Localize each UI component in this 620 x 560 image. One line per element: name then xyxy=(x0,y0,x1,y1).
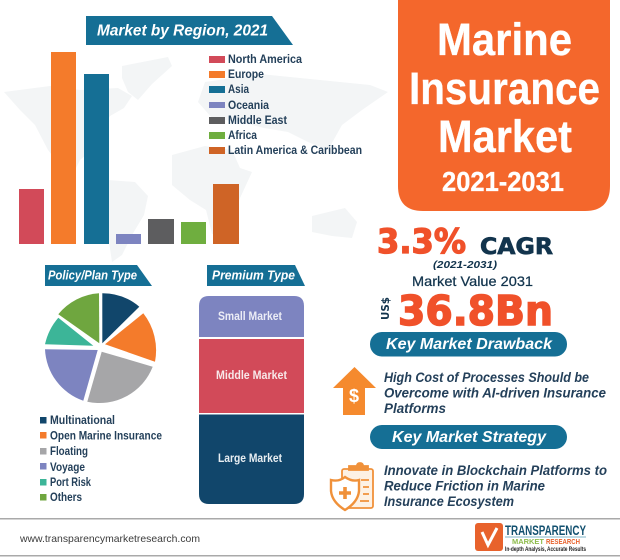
legend: policy/plan types: Voyage xyxy=(50,462,85,474)
segment: middle market: Middle Market xyxy=(216,370,287,382)
slice: Open Marine Insurance xyxy=(105,313,156,362)
strategy text xyxy=(384,463,607,509)
title panel: Market xyxy=(438,111,572,162)
slice: Voyage xyxy=(45,349,98,401)
icon: rising cost arrow: $ xyxy=(349,386,359,406)
heading pill: key market strategy xyxy=(370,425,567,449)
heading banner: premium type: Premium Type xyxy=(212,268,295,282)
legend: regions: Africa xyxy=(228,130,258,142)
drawback text xyxy=(384,370,606,416)
slice: Floating xyxy=(87,352,153,403)
legend: regions xyxy=(209,54,362,157)
stacked bar: premium type xyxy=(199,296,304,504)
bar: Middle East xyxy=(148,219,174,244)
strategy text: Insurance Ecosystem xyxy=(384,494,514,509)
footer rules xyxy=(0,518,620,520)
heading banner: market by region: Market by Region, 2021 xyxy=(97,22,268,40)
legend: policy/plan types: Floating xyxy=(50,446,88,458)
bar: Asia xyxy=(84,74,109,244)
legend: policy/plan types: Multinational xyxy=(50,415,115,427)
logo: Transparency Market Research: MARKET xyxy=(512,537,544,546)
legend: policy/plan types: Others xyxy=(50,492,82,504)
slice: Multinational xyxy=(102,293,139,343)
world map background xyxy=(4,57,388,262)
CAGR value: CAGR xyxy=(480,235,553,260)
icon: insurance clipboard xyxy=(331,463,373,510)
logo: Transparency Market Research xyxy=(475,523,587,553)
bar: North America xyxy=(19,189,44,244)
slice: Others xyxy=(58,293,99,343)
legend: policy/plan types xyxy=(40,415,162,504)
bar: Oceania xyxy=(116,234,141,244)
strategy text: Innovate in Blockchain Platforms to xyxy=(384,463,607,478)
bar: Latin America & Caribbean xyxy=(213,184,239,244)
segment: small market xyxy=(199,296,304,337)
slice: Port Risk xyxy=(45,318,93,346)
segment: large market: Large Market xyxy=(218,453,282,465)
logo: Transparency Market Research: RESEARCH xyxy=(546,537,580,546)
market value: US$ xyxy=(379,297,392,320)
legend: regions: Middle East xyxy=(228,115,287,127)
legend: regions: Oceania xyxy=(228,100,270,112)
drawback text: Platforms xyxy=(384,401,446,416)
website url: www.transparencymarketresearch.com xyxy=(19,533,200,545)
drawback text: Overcome with AI-driven Insurance xyxy=(384,386,606,400)
title panel: 2021-2031 xyxy=(442,166,564,197)
heading banner: market by region xyxy=(86,16,293,45)
market value: 36.8Bn xyxy=(398,287,553,335)
segment: small market: Small Market xyxy=(218,311,282,323)
segment: middle market xyxy=(199,339,304,413)
heading pill: key market drawback xyxy=(370,332,567,356)
bar: Europe xyxy=(51,52,76,244)
legend: policy/plan types: Port Risk xyxy=(50,477,91,489)
heading banner: policy/plan type: Policy/Plan Type xyxy=(48,268,137,282)
logo: Transparency Market Research: TRANSPARENCY xyxy=(505,523,586,538)
market value label: Market Value 2031 xyxy=(412,273,533,289)
title panel: Insurance xyxy=(409,63,600,114)
bar: Africa xyxy=(181,222,206,244)
heading banner: policy/plan type xyxy=(45,265,152,286)
heading pill: key market drawback: Key Market Drawback xyxy=(386,336,553,353)
title panel xyxy=(398,0,610,211)
bar chart: market by region xyxy=(19,52,239,244)
logo: Transparency Market Research: In-depth Analysis, Accurate Results xyxy=(505,547,587,553)
title panel: Marine xyxy=(437,14,572,65)
CAGR period: (2021-2031) xyxy=(433,259,498,271)
legend: regions: Europe xyxy=(228,69,264,81)
heading pill: key market strategy: Key Market Strategy xyxy=(392,429,547,446)
drawback text: High Cost of Processes Should be xyxy=(384,370,589,385)
legend: regions: North America xyxy=(228,54,303,66)
CAGR value: 3.3% xyxy=(377,222,466,262)
pie chart: policy/plan type xyxy=(45,293,156,403)
heading banner: premium type xyxy=(207,265,305,286)
segment: large market xyxy=(199,414,304,504)
legend: regions: Asia xyxy=(228,84,250,96)
strategy text: Reduce Friction in Marine xyxy=(384,478,545,494)
CAGR value xyxy=(377,222,553,262)
legend: policy/plan types: Open Marine Insurance xyxy=(50,430,162,442)
legend: regions: Latin America & Caribbean xyxy=(228,145,362,157)
icon: rising cost arrow xyxy=(333,367,376,415)
